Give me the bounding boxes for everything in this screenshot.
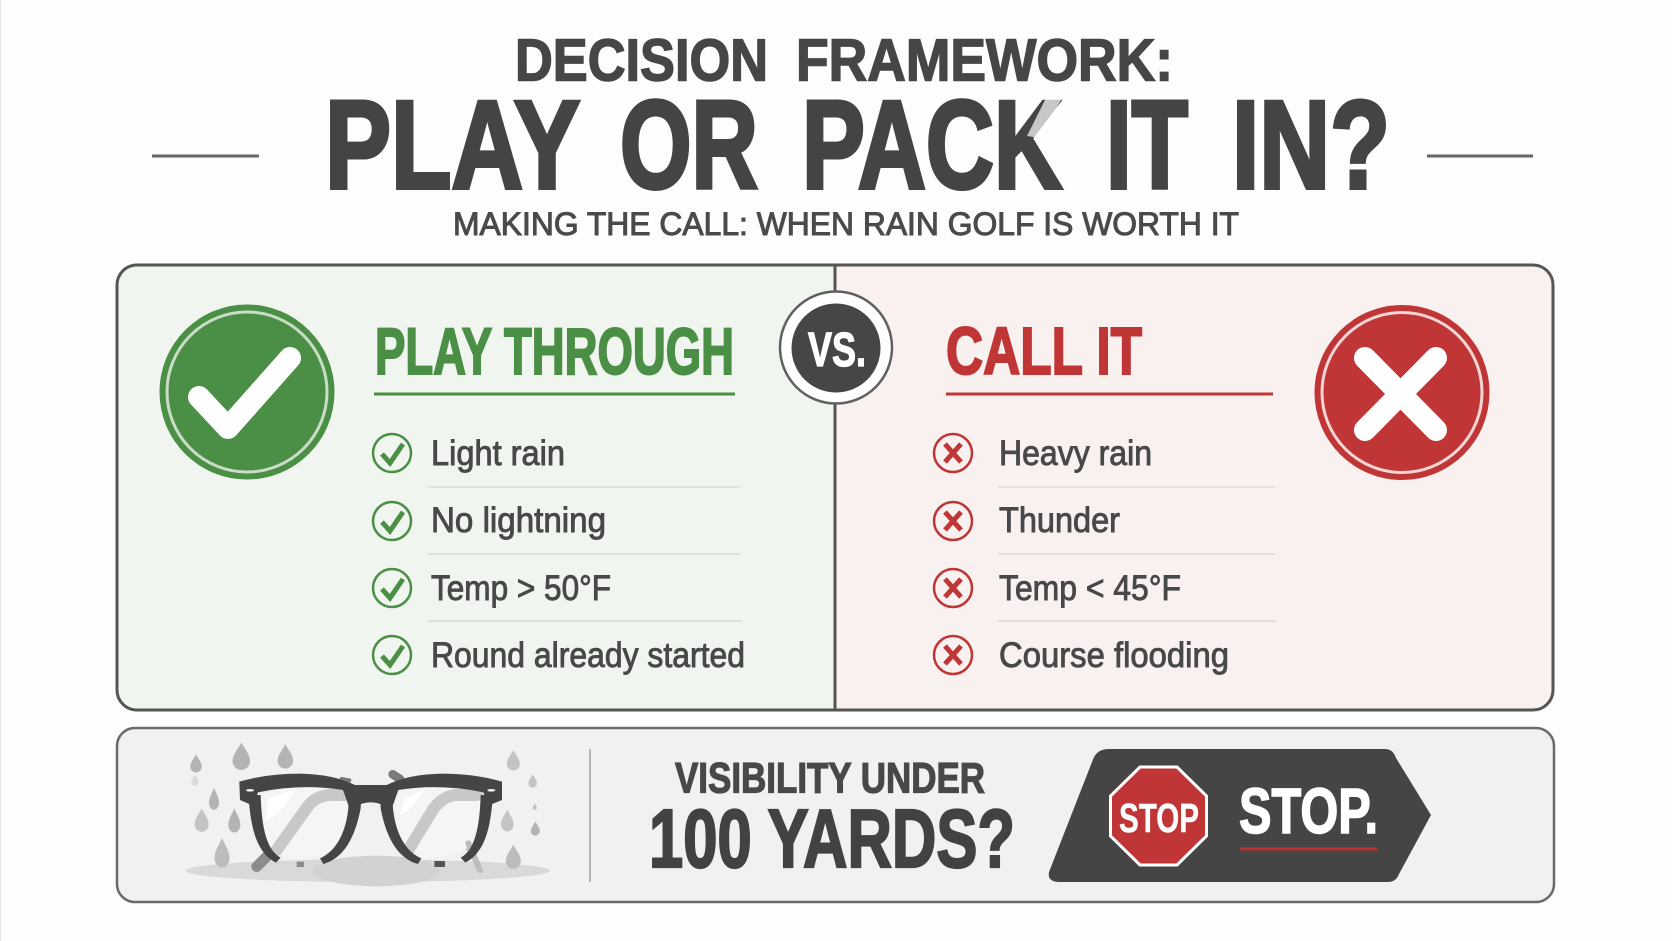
title line: decision framework: FRAMEWORK: [796,28,1173,94]
item: course flooding: Course flooding [999,636,1229,675]
item: light rain [373,434,565,473]
heading: play through: PLAY THROUGH [375,314,734,388]
panel: play through background [117,265,835,710]
icon: rain-covered glasses [185,742,550,886]
item: round already started: Round already started [431,636,745,675]
title side rule left [152,154,259,158]
main title: OR [620,76,758,215]
list: play through conditions [373,434,745,675]
title line: decision framework: DECISION [515,28,768,94]
item: light rain: Light rain [431,434,565,473]
title line: decision framework [515,28,1173,94]
icon: large red x badge [1314,305,1490,480]
comparison panel [117,265,1553,710]
temple arms [257,774,480,870]
badge: vs [780,292,892,404]
item: thunder [934,501,1120,540]
lens tint and highlights [260,787,482,859]
main title: IN? [1232,76,1390,215]
badge: vs: VS. [808,324,866,377]
item: temp below 45F [934,569,1181,608]
item: temp below 45F: Temp < 45°F [999,569,1181,608]
icon: large green check badge [160,304,334,480]
icon: stop sign [1110,767,1206,865]
glasses frame [239,774,502,864]
icon: stop sign: STOP [1119,795,1199,841]
panel: call it background [835,265,1553,710]
item: thunder: Thunder [999,501,1120,540]
main title: PACK [802,76,1062,215]
item: temp above 50F: Temp > 50°F [431,569,611,608]
item: no lightning: No lightning [431,501,606,540]
subtitle: MAKING THE CALL: WHEN RAIN GOLF IS WORTH IT [453,206,1239,242]
stop plate [1049,749,1431,882]
title side rule right [1427,154,1533,158]
heading: play through [374,314,735,396]
list: call it conditions [934,434,1276,675]
item: heavy rain [934,434,1152,473]
text: stop: STOP. [1239,775,1378,847]
main title: PLAY [325,76,580,215]
panel: visibility warning [117,728,1554,902]
item: temp above 50F [373,569,611,608]
main title: IT [1106,76,1188,215]
main title [325,76,1390,215]
text: 100 yards: 100 YARDS? [649,792,1015,885]
header [152,28,1533,242]
text: visibility under: VISIBILITY UNDER [675,754,985,802]
item: heavy rain: Heavy rain [999,434,1152,473]
heading: call it: CALL IT [946,314,1142,389]
